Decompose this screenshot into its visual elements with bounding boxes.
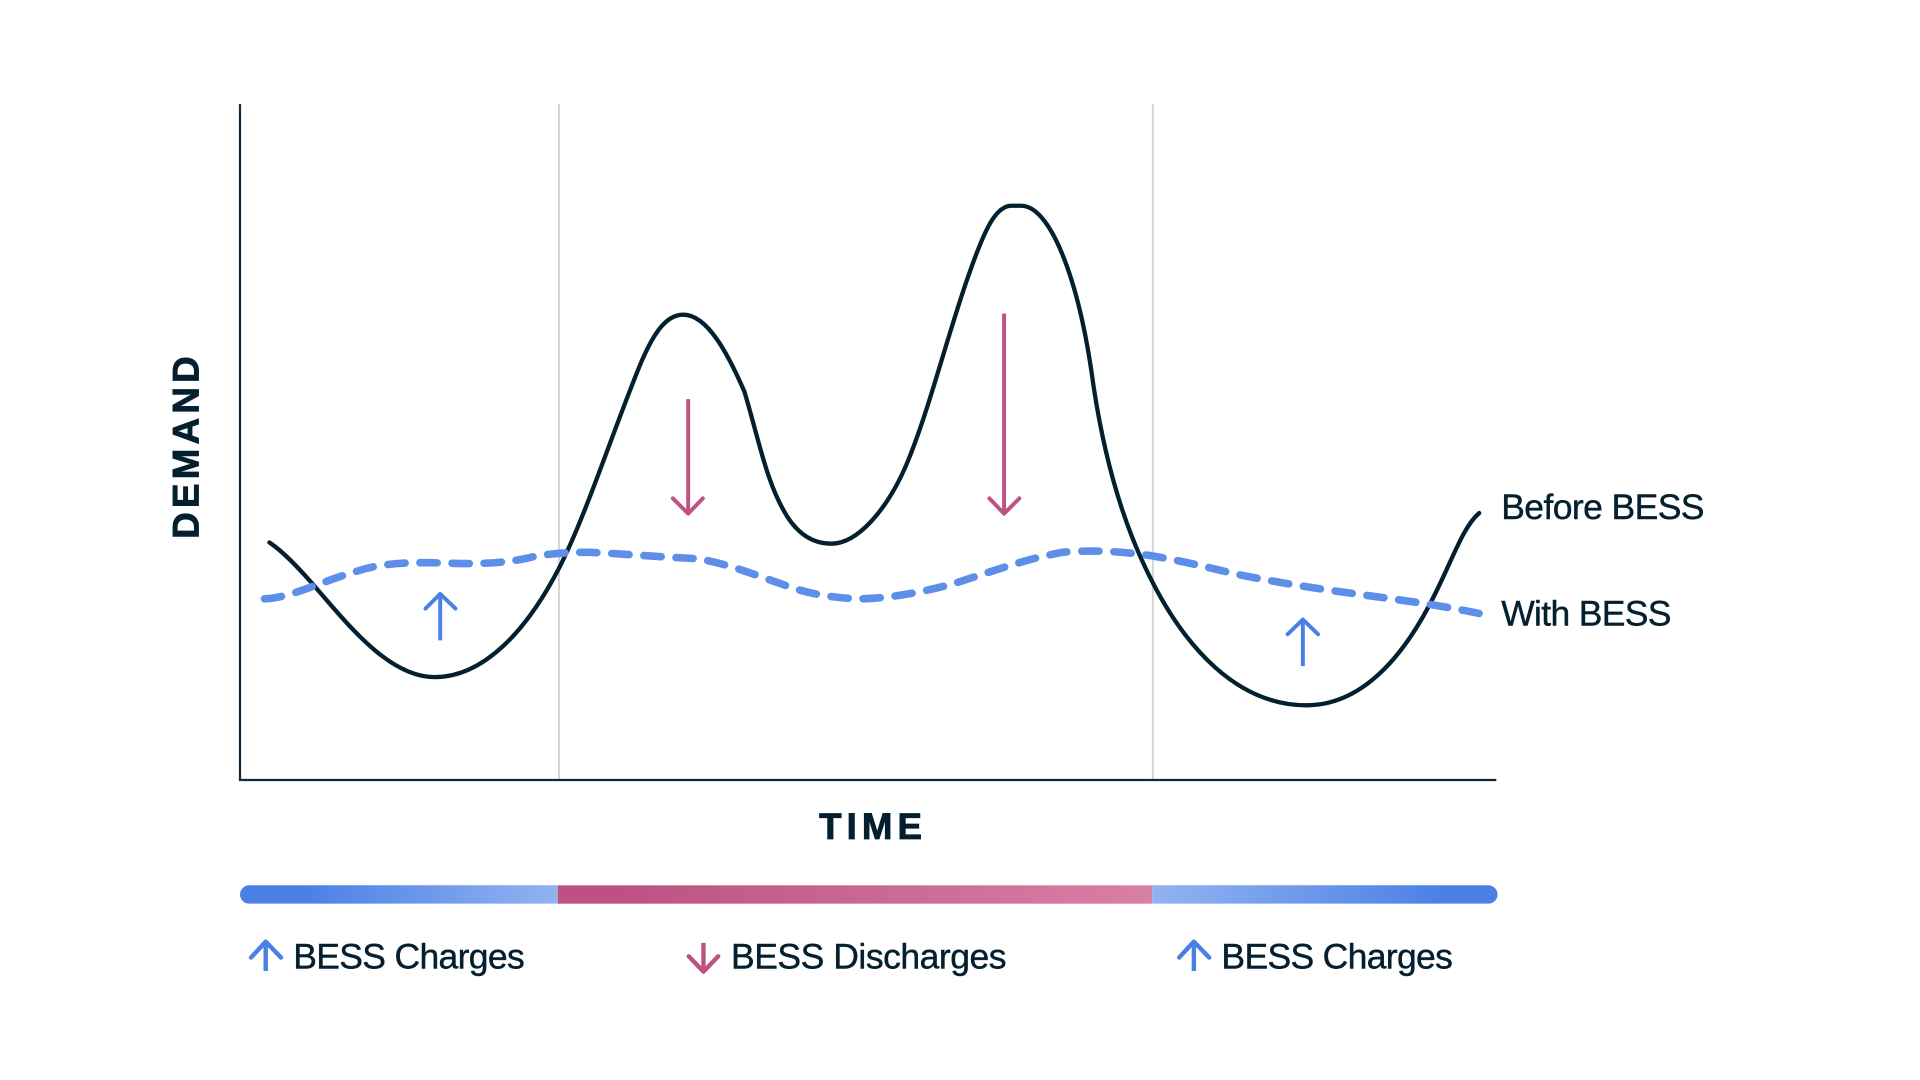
period divider: discharge to charge bbox=[1152, 104, 1154, 780]
label: BESS Charges bbox=[293, 937, 525, 977]
axes bbox=[240, 104, 1496, 780]
legend: BESS charges left bbox=[251, 937, 525, 977]
segment: discharging bbox=[558, 885, 1152, 904]
line label: before BESS: Before BESS bbox=[1501, 487, 1704, 527]
segment: charging bbox=[240, 885, 558, 904]
timeline bar bbox=[240, 885, 1498, 904]
segment: charging bbox=[1152, 885, 1498, 904]
period divider: charge to discharge bbox=[558, 104, 560, 780]
icon: up arrow bbox=[251, 942, 281, 971]
x axis title: TIME bbox=[819, 806, 922, 847]
chart: demand over time bbox=[240, 104, 1496, 780]
icon: up arrow bbox=[1179, 942, 1209, 971]
line label: with BESS: With BESS bbox=[1501, 594, 1671, 634]
arrow: charge 2 bbox=[1288, 620, 1318, 666]
y axis title: DEMAND bbox=[165, 356, 206, 539]
arrow: charge 1 bbox=[426, 594, 456, 640]
arrow: discharge 2 bbox=[989, 313, 1019, 514]
legend: BESS charges right bbox=[1179, 937, 1453, 977]
legend: BESS discharges bbox=[689, 937, 1007, 977]
label: BESS Discharges bbox=[731, 937, 1007, 977]
label: BESS Charges bbox=[1221, 937, 1453, 977]
line: before BESS bbox=[269, 206, 1479, 705]
icon: down arrow bbox=[689, 943, 718, 972]
arrow: discharge 1 bbox=[673, 399, 703, 514]
line: with BESS bbox=[264, 551, 1479, 613]
